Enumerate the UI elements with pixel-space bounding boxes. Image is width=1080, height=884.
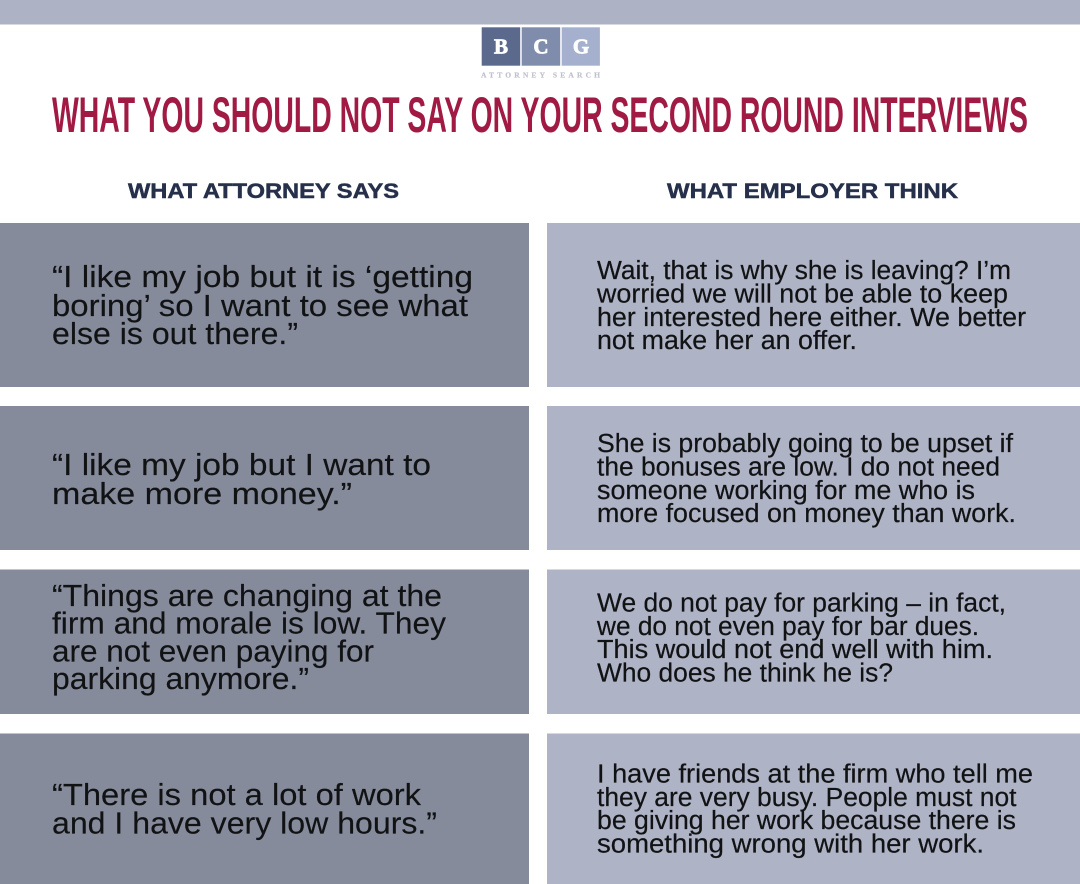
- panel: attorney says, row 3: [0, 570, 529, 714]
- panel: employer thinks, row 2: more focused on money than work.: [597, 500, 1016, 528]
- panel: attorney says, row 4: “There is not a lot of work: [52, 778, 422, 812]
- panel: attorney says, row 4: [0, 734, 529, 884]
- panel: attorney says, row 3: parking anymore.”: [52, 662, 309, 696]
- panel: employer thinks, row 1: her interested here either. We better: [597, 304, 1027, 332]
- panel: employer thinks, row 4: I have friends at the firm who tell me: [597, 760, 1033, 788]
- panel: employer thinks, row 3: We do not pay for parking – in fact,: [597, 589, 1006, 617]
- panel: attorney says, row 2: “I like my job but I want to: [52, 448, 431, 482]
- logo: BCG Attorney Search: ATTORNEY SEARCH: [481, 70, 600, 80]
- panel: attorney says, row 1: boring’ so I want to see what: [52, 289, 469, 323]
- panel: attorney says, row 1: [0, 223, 529, 387]
- panel: employer thinks, row 4: something wrong with her work.: [597, 830, 984, 858]
- logo: BCG Attorney Search: B: [494, 34, 508, 58]
- panel: attorney says, row 1: “I like my job but it is ‘getting: [52, 260, 473, 294]
- heading: what employer think: WHAT EMPLOYER THINK: [667, 179, 959, 203]
- panel: employer thinks, row 3: we do not even pay for bar dues.: [596, 613, 979, 641]
- panel: employer thinks, row 4: be giving her work because there is: [597, 807, 1016, 835]
- panel: attorney says, row 3: are not even paying for: [52, 635, 374, 669]
- top band: [0, 0, 1080, 24]
- panel: employer thinks, row 1: not make her an offer.: [597, 327, 857, 355]
- logo: BCG Attorney Search: G: [573, 34, 589, 58]
- panel: employer thinks, row 2: [547, 406, 1080, 550]
- panel: attorney says, row 1: else is out there.”: [52, 317, 298, 351]
- panel: employer thinks, row 3: [547, 570, 1080, 714]
- panel: employer thinks, row 1: worried we will not be able to keep: [596, 281, 1008, 309]
- panel: attorney says, row 2: make more money.”: [52, 477, 352, 511]
- logo: BCG Attorney Search: [481, 27, 600, 80]
- panel: attorney says, row 4: and I have very low hours.”: [52, 807, 437, 841]
- panel: employer thinks, row 1: [547, 223, 1080, 387]
- logo: BCG Attorney Search: C: [533, 34, 549, 58]
- heading: what attorney says: WHAT ATTORNEY SAYS: [128, 179, 399, 203]
- panel: employer thinks, row 1: Wait, that is why she is leaving? I’m: [597, 257, 1011, 285]
- panel: employer thinks, row 4: [547, 734, 1080, 884]
- panel: employer thinks, row 2: someone working for me who is: [597, 477, 975, 505]
- panel: attorney says, row 3: firm and morale is low. They: [52, 607, 447, 641]
- panel: attorney says, row 3: “Things are changing at the: [52, 579, 442, 613]
- panel: employer thinks, row 2: She is probably going to be upset if: [597, 430, 1014, 458]
- panel: employer thinks, row 3: Who does he think he is?: [597, 659, 893, 687]
- panel: employer thinks, row 2: the bonuses are low. I do not need: [597, 453, 1000, 481]
- panel: employer thinks, row 4: they are very busy. People must not: [597, 784, 1016, 812]
- panel: attorney says, row 2: [0, 406, 529, 550]
- panel: employer thinks, row 3: This would not end well with him.: [597, 636, 993, 664]
